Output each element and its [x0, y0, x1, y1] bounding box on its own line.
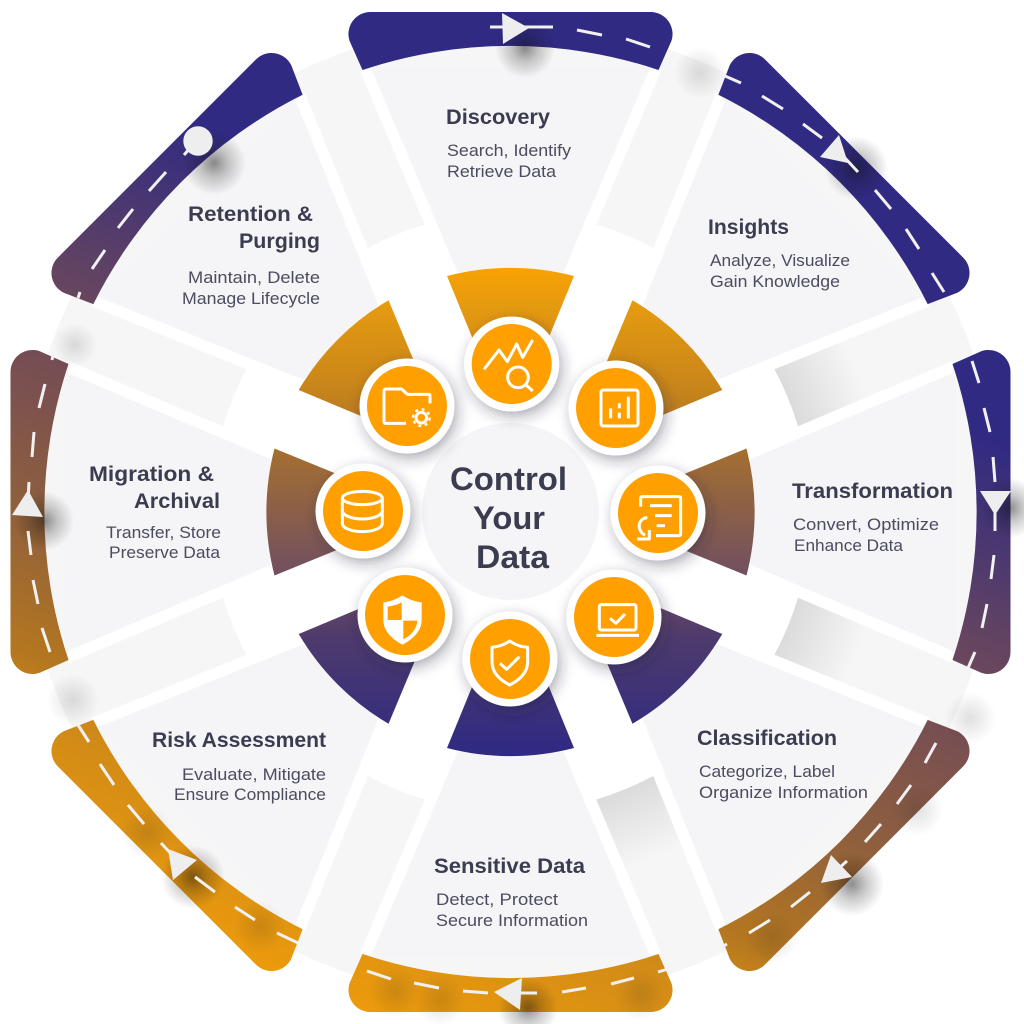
text: Migration details: Preserve Data	[109, 544, 221, 562]
heading: Retention & Purging: Retention &	[188, 203, 313, 226]
heading: Transformation: Transformation	[792, 480, 953, 503]
road: Discovery dashes and arrow	[490, 13, 650, 47]
heading: Migration & Archival: Archival	[134, 490, 220, 513]
text: Risk Assessment details: Evaluate, Mitigate	[182, 766, 326, 784]
text: Classification details: Organize Information	[699, 784, 868, 802]
icon: Classification laptop check	[566, 570, 662, 664]
panel: Risk Assessment	[97, 583, 440, 926]
heading: Migration & Archival: Migration &	[89, 463, 214, 486]
icon: Retention folder gear	[360, 358, 454, 454]
road: Transformation dashes and arrow	[968, 361, 1011, 668]
road: Classification dashes and arrow	[722, 743, 936, 947]
text: Insights details	[710, 252, 850, 291]
icon: Discovery chart search	[464, 316, 559, 412]
road: Sensitive Data dashes and arrow	[367, 969, 668, 1010]
heading: Retention & Purging	[188, 203, 320, 253]
panel: Sensitive Data	[370, 752, 650, 957]
road: Retention dashes and end marker	[78, 126, 213, 298]
text: Transformation details	[793, 516, 939, 555]
text: Risk Assessment details: Ensure Compliance	[174, 786, 326, 804]
panel: Classification	[581, 583, 924, 926]
heading: Discovery: Discovery	[446, 106, 550, 129]
text: Discovery details: Search, Identify	[447, 142, 572, 160]
text: Transformation details: Convert, Optimize	[793, 516, 939, 534]
title	[450, 461, 567, 575]
panel: Migration & Archival	[66, 372, 270, 652]
icon: Risk Assessment checker shield	[358, 568, 452, 662]
title: Control	[450, 461, 567, 497]
text: Sensitive Data details: Secure Information	[436, 912, 588, 930]
road: Migration dashes and arrow	[12, 355, 53, 652]
title: Data	[476, 539, 550, 575]
heading: Risk Assessment: Risk Assessment	[152, 729, 326, 752]
panel: Insights	[581, 98, 924, 441]
panel: Transformation	[750, 372, 956, 652]
text: Discovery details	[447, 142, 572, 181]
icon: Migration database	[316, 464, 410, 558]
heading: Insights: Insights	[708, 216, 789, 239]
center circle	[422, 423, 599, 600]
text: Transformation details: Enhance Data	[794, 537, 904, 555]
text: Migration details: Transfer, Store	[106, 524, 221, 542]
heading: Retention & Purging: Purging	[239, 230, 320, 253]
text: Discovery details: Retrieve Data	[447, 163, 557, 181]
icon: Insights bar chart	[568, 360, 664, 456]
text: Sensitive Data details	[436, 891, 588, 930]
title: Your	[473, 500, 545, 536]
text: Classification details	[699, 763, 868, 802]
inner wedges	[266, 268, 755, 756]
text: Sensitive Data details: Detect, Protect	[436, 891, 558, 909]
text: Migration details	[106, 524, 221, 562]
text: Retention details: Manage Lifecycle	[182, 290, 320, 308]
heading: Migration & Archival	[89, 463, 220, 513]
text: Insights details: Gain Knowledge	[710, 273, 840, 291]
heading: Sensitive Data: Sensitive Data	[434, 855, 585, 878]
gap shadows	[464, 198, 954, 956]
text: Retention details	[182, 269, 320, 308]
icon: Transformation document loop	[610, 466, 706, 560]
road: Insights dashes and arrow	[725, 76, 944, 292]
text: Risk Assessment details	[174, 766, 326, 804]
panel: Discovery	[370, 67, 650, 272]
icon: Sensitive Data shield check	[462, 612, 558, 706]
text: Insights details: Analyze, Visualize	[710, 252, 850, 270]
panel: Retention & Purging	[97, 98, 440, 441]
text: Classification details: Categorize, Label	[699, 763, 835, 781]
road: Risk Assessment dashes and arrow	[78, 725, 298, 943]
text: Retention details: Maintain, Delete	[188, 269, 320, 287]
heading: Classification: Classification	[697, 727, 837, 750]
